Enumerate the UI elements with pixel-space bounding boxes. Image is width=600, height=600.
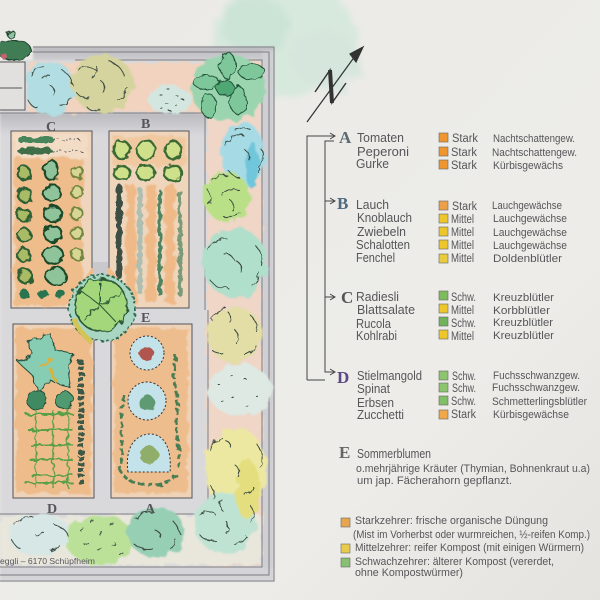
bed A crops xyxy=(120,336,180,485)
group A: Kürbisgewächs xyxy=(493,160,563,172)
group C: Mittel xyxy=(451,331,474,343)
group B xyxy=(337,194,567,265)
group B: Lauchgewächse xyxy=(493,240,567,252)
group D: Schw. xyxy=(451,396,476,408)
group B: Mittel xyxy=(451,240,474,252)
planting strips xyxy=(0,62,262,566)
group B: Zwiebeln xyxy=(357,224,406,239)
group C: Mittel xyxy=(451,305,474,317)
center circle bed E xyxy=(69,262,135,342)
group B: Knoblauch xyxy=(357,210,412,225)
bed C wash xyxy=(14,134,88,306)
group B: Mittel xyxy=(451,253,474,265)
group B: Lauch xyxy=(356,197,389,212)
fertilizer legend: Starkzehrer: frische organische Düngung xyxy=(355,515,548,527)
group C: Kreuzblütler xyxy=(493,292,554,304)
bed B crops xyxy=(114,140,182,295)
bed C xyxy=(11,131,92,308)
group C: Korbblütler xyxy=(493,305,550,317)
group E text: E xyxy=(339,443,350,462)
bed labels: A xyxy=(145,502,156,517)
bed labels: C xyxy=(46,120,56,135)
bed C crops xyxy=(18,137,83,299)
group A: Stark xyxy=(452,133,478,145)
border plants xyxy=(9,55,272,565)
group A: Peperoni xyxy=(357,144,409,159)
group A: Tomaten xyxy=(357,130,404,145)
group D: Stielmangold xyxy=(357,368,422,383)
group D xyxy=(337,368,587,422)
group C: Kreuzblütler xyxy=(493,330,554,342)
bed labels: D xyxy=(47,502,57,517)
group B: Lauchgewächse xyxy=(492,200,562,212)
watercolor wash behind compass xyxy=(213,0,359,96)
bed labels xyxy=(46,117,156,517)
group D: Fuchsschwanzgew. xyxy=(492,382,580,394)
group C: Kreuzblütler xyxy=(493,317,553,329)
group B: Lauchgewächse xyxy=(493,213,567,225)
group A xyxy=(339,128,577,172)
compass north arrow xyxy=(307,47,363,122)
group D: Erbsen xyxy=(357,395,394,410)
group B: Mittel xyxy=(451,227,474,239)
fertilizer legend xyxy=(341,515,590,579)
group D: Spinat xyxy=(357,381,390,396)
group C: Radiesli xyxy=(356,289,399,304)
bracket arrows xyxy=(307,133,335,380)
group D: Fuchsschwanzgew. xyxy=(493,370,580,382)
bed D xyxy=(13,324,94,498)
fertilizer legend: Schwachzehrer: älterer Kompost (vererdet, xyxy=(355,556,554,568)
group B: Stark xyxy=(452,201,477,213)
group D: D xyxy=(337,368,349,387)
group B: Doldenblütler xyxy=(493,253,562,265)
group E text xyxy=(339,443,590,487)
fertilizer legend: ohne Kompostwürmer) xyxy=(355,567,463,579)
group C: Blattsalate xyxy=(357,302,415,317)
garden plan xyxy=(0,30,274,581)
group D: Schw. xyxy=(452,371,476,383)
plant scribbles xyxy=(12,62,262,555)
bed B wash xyxy=(113,136,185,303)
group B: Fenchel xyxy=(356,250,395,265)
bed A xyxy=(111,324,192,498)
top left corner plant xyxy=(0,30,31,110)
group C: Rucola xyxy=(356,316,392,331)
group C xyxy=(341,288,554,343)
group E text: um jap. Fächerahorn gepflanzt. xyxy=(357,475,512,487)
bed D wash xyxy=(16,328,91,493)
group B: Lauchgewächse xyxy=(493,227,567,239)
bed labels: B xyxy=(141,117,150,132)
group A: Gurke xyxy=(356,156,389,171)
group D: Schmetterlingsblütler xyxy=(492,396,587,408)
group A: Stark xyxy=(451,147,477,159)
group B: B xyxy=(337,194,348,213)
group C: C xyxy=(341,288,353,307)
bed D crops xyxy=(18,333,81,488)
group D: Kürbisgewächse xyxy=(493,409,569,421)
group A: Nachtschattengew. xyxy=(492,147,577,159)
group C: Kohlrabi xyxy=(356,328,397,343)
group D: Schw. xyxy=(452,383,476,395)
fertilizer legend: Mittelzehrer: reifer Kompost (mit einigen Würmern) xyxy=(355,542,584,554)
bed A wash xyxy=(114,328,188,493)
group E text: Sommerblumen xyxy=(357,446,431,461)
leaves on top right plant xyxy=(193,53,265,118)
group B: Schalotten xyxy=(356,237,410,252)
group C: Schw. xyxy=(451,292,476,304)
group C: Schw. xyxy=(451,318,476,330)
group A: Nachtschattengew. xyxy=(493,133,575,145)
signature: eggli – 6170 Schüpfheim xyxy=(0,557,95,566)
garden frame and paths xyxy=(0,47,274,581)
group D: Zucchetti xyxy=(357,407,404,422)
group A: A xyxy=(339,128,352,147)
group D: Stark xyxy=(451,409,476,421)
frame lines xyxy=(0,47,274,581)
bed B xyxy=(109,131,189,308)
group E text: o.mehrjährige Kräuter (Thymian, Bohnenkraut u.a) xyxy=(356,463,590,475)
group A: Stark xyxy=(451,160,477,172)
bed labels: E xyxy=(141,311,150,326)
group B: Mittel xyxy=(451,214,474,226)
